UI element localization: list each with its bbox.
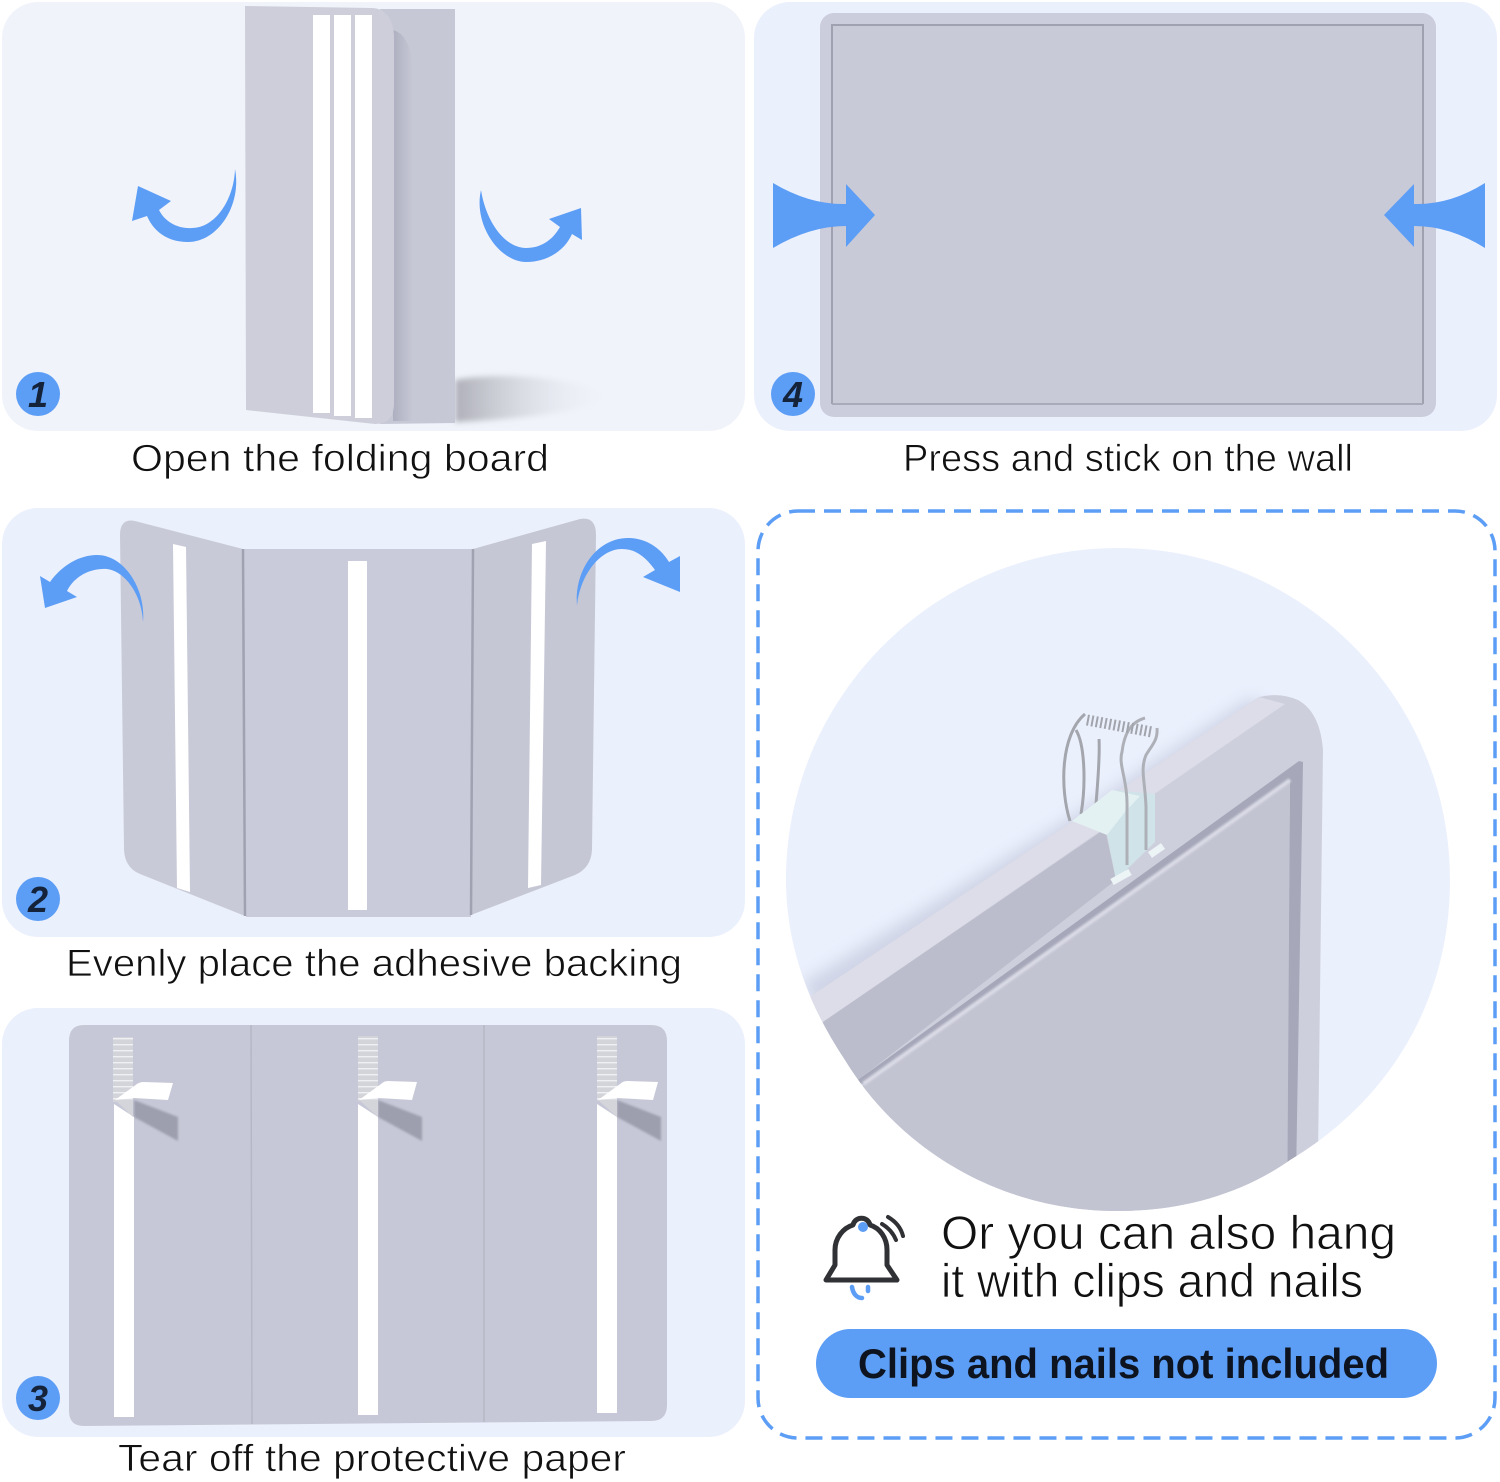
panel: step 2 adhesive backing	[2, 508, 745, 937]
step badge 3	[16, 1376, 60, 1420]
adhesive strip right	[597, 1036, 661, 1413]
recessed side band	[820, 829, 1116, 1080]
top bevel strip	[805, 697, 1285, 1024]
note text: it with clips and nails	[941, 1254, 1363, 1307]
binder clip	[1064, 714, 1163, 882]
caption: step 1: Open the folding board	[131, 438, 549, 480]
arrow: press from left	[773, 183, 875, 248]
note text: Or you can also hang	[941, 1206, 1396, 1259]
circle detail: clip on board corner	[786, 548, 1450, 1240]
step badge 1	[16, 372, 60, 416]
step badge 1: 1	[28, 374, 48, 415]
arrow: curved left	[132, 169, 236, 242]
panel: step 4 press on wall	[754, 2, 1497, 431]
arrow: curved right up	[577, 538, 680, 606]
callout pill: not included	[816, 1329, 1437, 1398]
caption: step 4: Press and stick on the wall	[903, 438, 1353, 480]
tri-fold board	[120, 519, 596, 917]
board shadow on floor	[455, 376, 615, 422]
arrow: curved right	[480, 190, 582, 262]
icon: ringing bell	[826, 1217, 903, 1298]
board front view	[820, 13, 1436, 417]
step badge 3: 3	[28, 1378, 48, 1419]
caption: step 2: Evenly place the adhesive backing	[66, 943, 682, 985]
step badge 4	[771, 372, 815, 416]
callout pill: not included: Clips and nails not included	[858, 1340, 1389, 1387]
flat open board	[69, 1025, 667, 1426]
arrow: curved left up	[40, 555, 143, 622]
inner panel face	[860, 780, 1290, 1240]
board body	[800, 695, 1323, 1240]
inner groove	[858, 761, 1303, 1162]
folded board illustration	[245, 6, 455, 424]
panel: step 3 tear off paper	[2, 1008, 745, 1437]
step badge 2	[16, 877, 60, 921]
wall shadow along top edge	[804, 697, 1256, 996]
step badge 2: 2	[27, 879, 48, 920]
adhesive strip left	[113, 1037, 178, 1417]
step badge 4: 4	[782, 374, 803, 415]
panel: step 1 open the folding board	[2, 2, 745, 431]
note text	[941, 1206, 1396, 1307]
panel: hanging alternative dashed frame	[758, 511, 1495, 1438]
caption: step 3: Tear off the protective paper	[118, 1438, 626, 1480]
adhesive strip middle	[358, 1036, 422, 1415]
arrow: press from right	[1384, 183, 1485, 248]
